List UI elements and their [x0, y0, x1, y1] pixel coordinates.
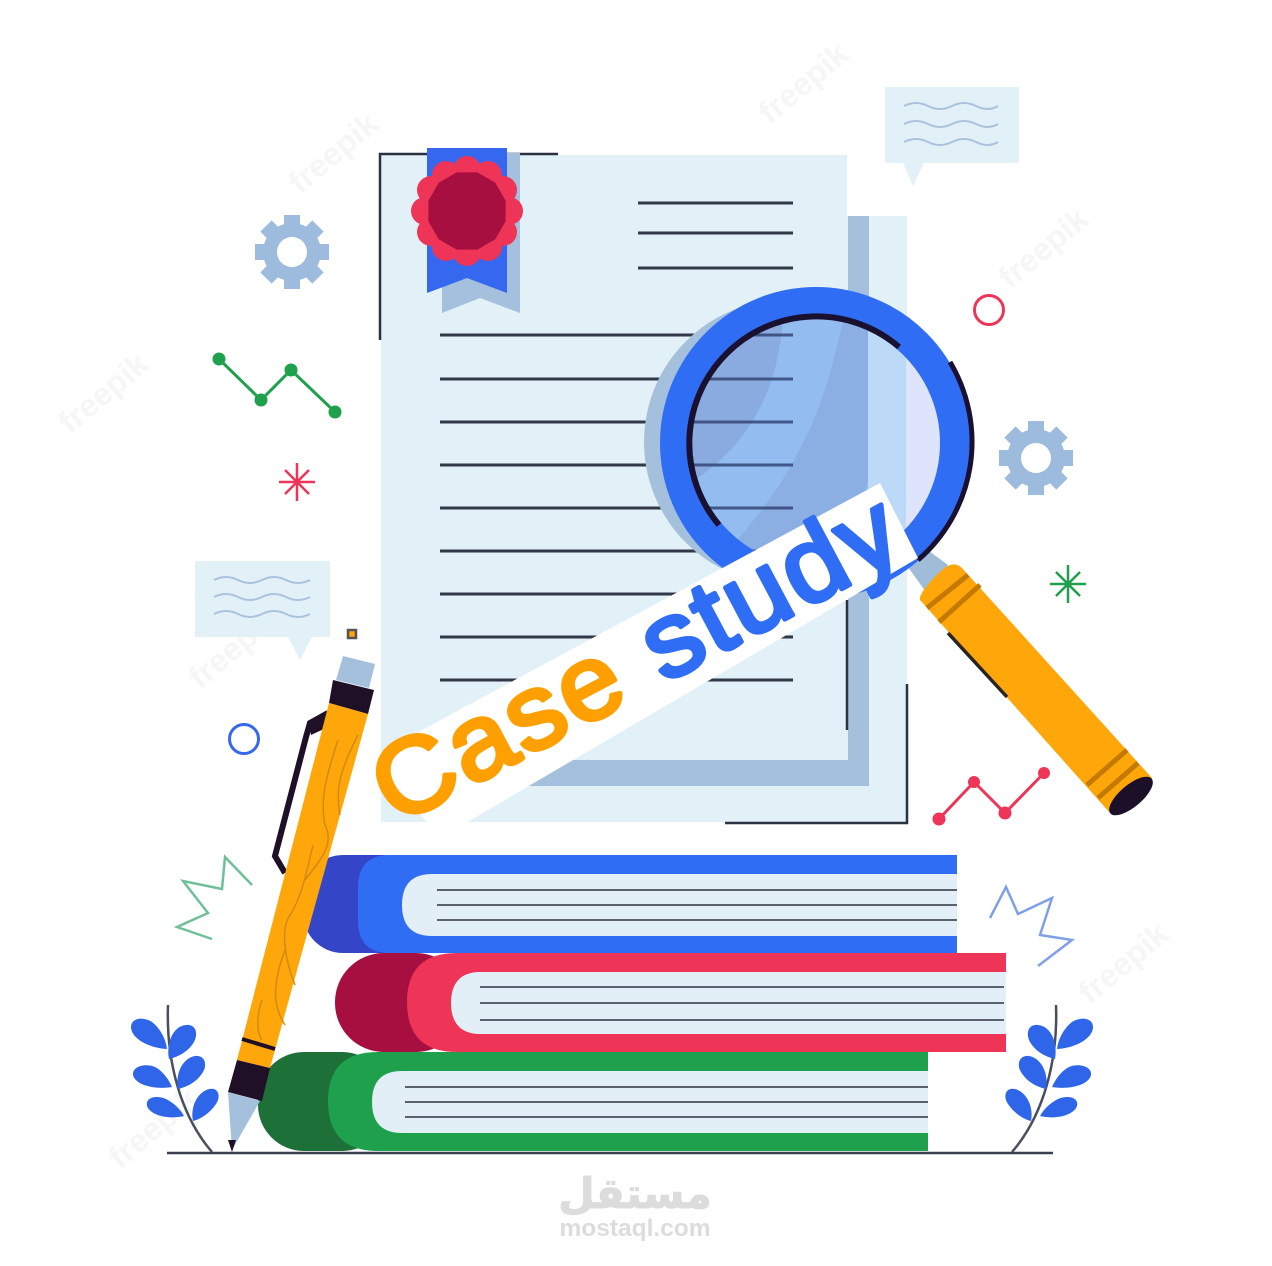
seal centre	[428, 172, 506, 250]
header lines	[638, 203, 793, 268]
body text lines	[440, 335, 793, 680]
lens shadow	[644, 300, 928, 584]
pencil body	[237, 703, 368, 1068]
green zigzag	[177, 857, 252, 939]
banner	[351, 468, 921, 846]
handle neck	[908, 548, 948, 595]
ribbon shadow	[442, 153, 520, 313]
red book	[335, 953, 1006, 1052]
blue zigzag	[990, 887, 1072, 966]
watermark: mostaql: mostaql.com	[559, 1215, 711, 1242]
watermark: freepik: freepik	[101, 1080, 205, 1175]
document stack	[380, 154, 907, 823]
lens band	[738, 322, 868, 550]
red ring	[974, 296, 1004, 324]
pencil clip	[275, 713, 328, 873]
sheet shadow	[480, 216, 869, 786]
pencil bands	[242, 1039, 275, 1049]
green asterisk	[1050, 565, 1086, 603]
ribbon	[427, 148, 507, 293]
watermark: freepik: freepik	[1071, 915, 1175, 1010]
red line chart	[932, 767, 1050, 826]
handle	[920, 564, 1152, 813]
small square	[348, 630, 356, 638]
lens dark highlight	[692, 324, 782, 478]
left plant	[131, 1005, 219, 1152]
blue book	[303, 855, 957, 953]
watermark: mostaql: مستقل	[558, 1169, 712, 1218]
watermark: freepik: freepik	[181, 600, 285, 695]
lens	[692, 320, 940, 550]
lens lines	[694, 334, 793, 550]
gear right	[999, 421, 1073, 495]
seal scallops	[411, 156, 523, 266]
watermark: freepik: freepik	[991, 200, 1095, 295]
back sheet	[381, 216, 907, 822]
gear left	[255, 215, 329, 289]
right plant	[1005, 1005, 1093, 1152]
banner band	[372, 483, 918, 838]
green line chart	[212, 352, 342, 418]
pencil	[228, 656, 375, 1152]
red asterisk	[279, 463, 315, 501]
speech bubble top right	[885, 87, 1019, 186]
pencil cap	[336, 656, 375, 688]
main sheet	[381, 155, 847, 800]
page outline strokes	[380, 154, 907, 823]
blue ring	[230, 724, 258, 754]
speech bubble left	[195, 561, 330, 660]
ground line	[167, 1152, 1053, 1154]
watermark: mostaql	[558, 1169, 712, 1242]
green book	[258, 1052, 928, 1151]
lens ring	[676, 303, 956, 583]
watermark: freepik: freepik	[51, 345, 155, 440]
banner text: Case study	[351, 468, 921, 846]
watermark: freepik: freepik	[751, 35, 855, 130]
magnifying glass	[644, 300, 1159, 822]
ribbon badge	[411, 148, 523, 313]
watermark: freepik: freepik	[281, 105, 385, 200]
books	[258, 855, 1006, 1151]
watermark: freepik	[51, 35, 1175, 1175]
pencil tip	[228, 1092, 260, 1150]
pencil grain	[258, 735, 358, 1040]
